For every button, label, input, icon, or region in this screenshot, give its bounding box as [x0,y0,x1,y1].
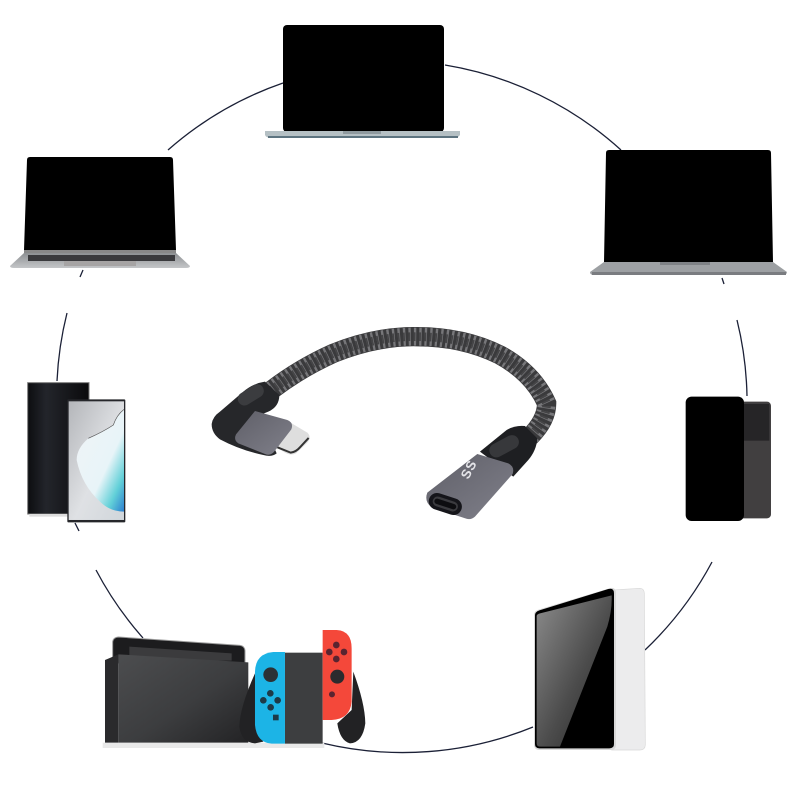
base shadow [103,743,324,748]
USB-C plug tip [267,419,310,455]
boot button [487,433,521,460]
socket metal shell [426,454,513,519]
socket opening [427,491,464,517]
device: left phones [28,383,125,522]
USB-C cable product [212,337,547,519]
device: top laptop [265,25,460,138]
SS logo: SS [458,457,480,481]
device: right laptop [590,150,787,275]
device: left laptop [10,157,190,268]
braided cable [272,337,547,437]
right-angle plug boot [212,382,279,456]
device: right phones [686,397,771,521]
boot button [235,382,266,408]
plug metal shell [235,411,292,455]
connecting circle arcs [57,65,747,753]
blue controller [255,652,285,744]
red controller [323,630,352,720]
female socket boot [480,426,537,477]
dock and screen [105,637,248,743]
grip centre [285,653,323,744]
grip handles [239,672,365,743]
device: game console [103,630,365,748]
device: tablet [534,588,645,750]
